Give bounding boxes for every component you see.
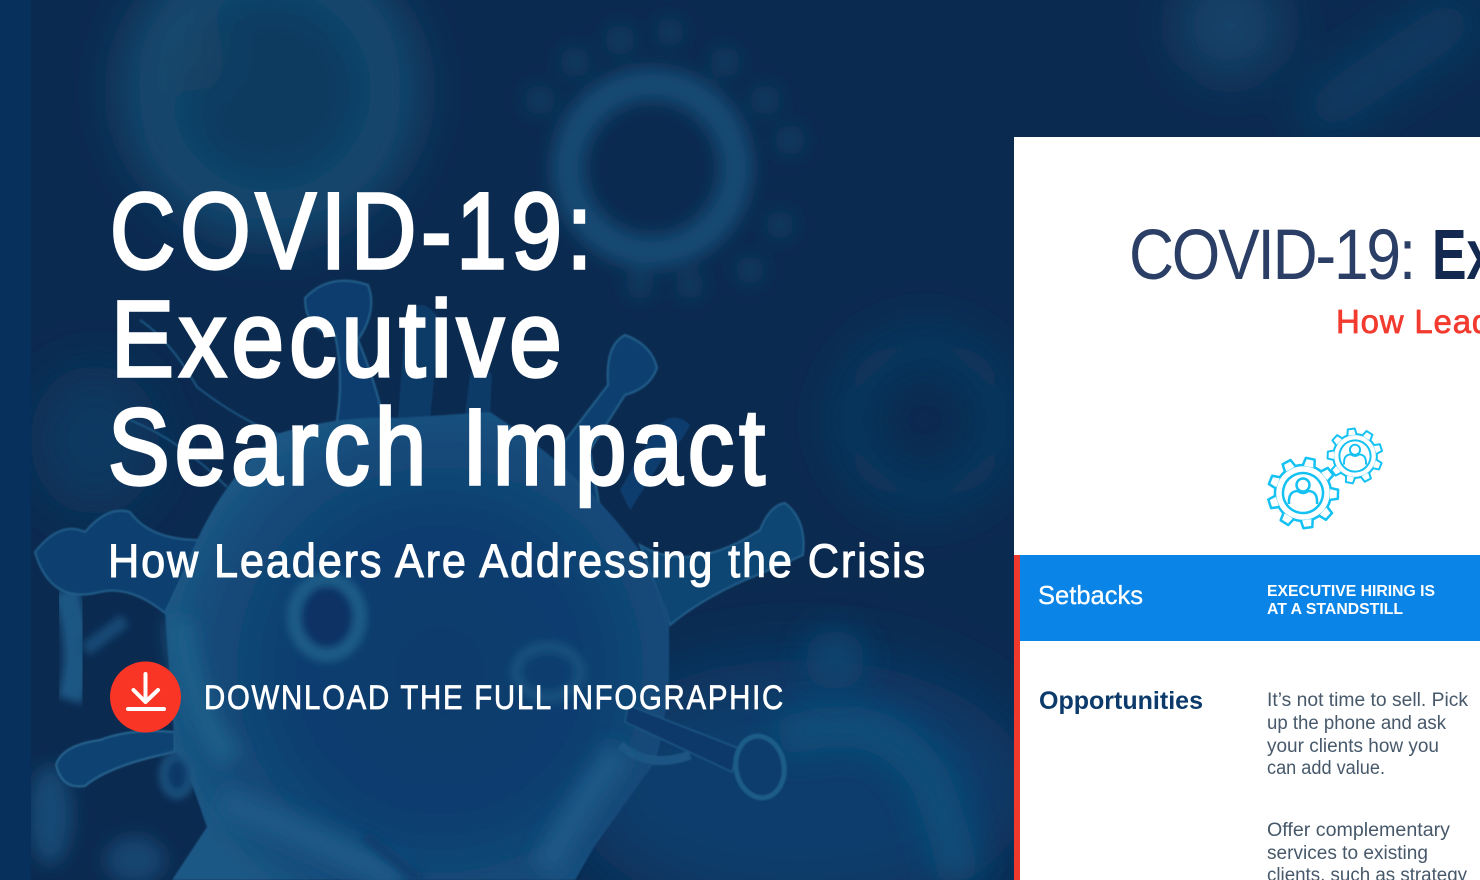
body lower fold line (365, 835, 420, 880)
spike: small right (620, 418, 690, 510)
main virus crater (163, 579, 580, 795)
opportunities body text: It’s not time to sell. Pick (1267, 690, 1468, 711)
opportunities body text: services to existing (1267, 843, 1428, 864)
blurred virus: lower right field (570, 630, 1030, 880)
icon: people gears (1261, 425, 1386, 535)
subtitle: How Leaders Are Addressing the Crisis (108, 534, 927, 587)
spike: top centre (305, 281, 385, 432)
setbacks statement (1267, 583, 1435, 618)
icon: download button (110, 662, 181, 732)
opportunities body text: can add value. (1267, 758, 1385, 779)
red left accent bar (1014, 555, 1020, 880)
opportunities label: Opportunities (1039, 687, 1203, 715)
download call to action: DOWNLOAD THE FULL INFOGRAPHIC (204, 679, 785, 717)
setbacks statement: EXECUTIVE HIRING IS (1267, 583, 1435, 600)
spike: lower right with head (620, 705, 789, 802)
blurred virus: upper right (850, 0, 1470, 495)
title line 2: Executive (111, 278, 567, 399)
spike: lower left (56, 731, 175, 787)
preview title: light part: COVID-19: (1129, 216, 1414, 295)
opportunities body text: Offer complementary (1267, 820, 1451, 841)
blurred virus: top centre ring (525, 18, 805, 299)
title line 1: COVID-19: (110, 170, 597, 291)
main title (108, 170, 770, 507)
panel: infographic preview (1014, 137, 1480, 880)
main virus spikes (35, 281, 804, 787)
blurred virus: left cluster (28, 365, 165, 880)
spike: top left thin (130, 320, 280, 487)
opportunities body text: up the phone and ask (1267, 713, 1446, 734)
blurred virus: top left (145, 0, 395, 215)
setbacks statement: AT A STANDSTILL (1267, 601, 1403, 618)
title line 3: Search Impact (108, 386, 770, 507)
spike: upper right (552, 335, 657, 510)
preview white page (1014, 137, 1480, 880)
small gear (1324, 425, 1386, 487)
opportunities body text (1267, 690, 1468, 880)
spike: left flared (35, 511, 200, 613)
large gear (1261, 451, 1345, 535)
left vertical band (0, 0, 31, 880)
body surface highlights (180, 620, 620, 880)
spike: right (640, 503, 804, 625)
setbacks label: Setbacks (1038, 580, 1143, 610)
spike: behind title (398, 305, 440, 420)
setbacks blue band (1020, 555, 1480, 641)
main virus body (165, 412, 669, 880)
opportunities body text: your clients how you (1267, 736, 1439, 757)
